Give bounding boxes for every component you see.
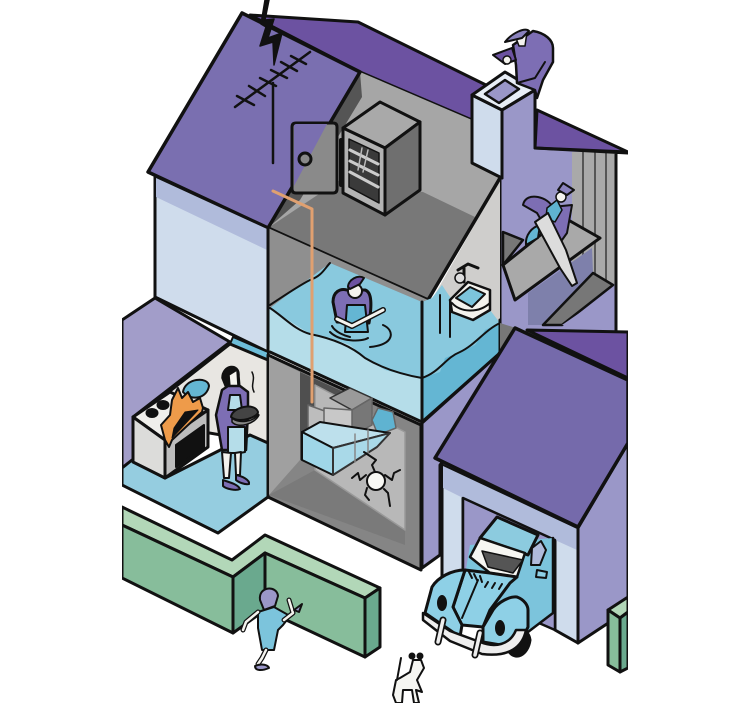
icon: blue beetle car bbox=[423, 517, 553, 656]
panel: garage bbox=[435, 328, 628, 643]
pipe: orange gas line bbox=[273, 191, 312, 402]
panel: attic floor edge bbox=[268, 178, 500, 300]
icon: burning stove bbox=[133, 380, 209, 478]
icon: tv antenna bbox=[235, 52, 310, 163]
panel: right side wall behind sink bbox=[435, 182, 500, 321]
icon: overflowing sink bbox=[440, 264, 490, 337]
icon: sparking light bulb bbox=[352, 452, 400, 506]
panel: garden wall bbox=[122, 507, 380, 657]
panel: sawing table bbox=[503, 217, 600, 300]
icon: man climbing wall bbox=[243, 589, 302, 670]
panel: kitchen floor and walls bbox=[122, 298, 268, 533]
icon: woman with burnt turkey bbox=[216, 366, 259, 490]
icon: open safe bbox=[292, 102, 420, 215]
icon: lightning bolt bbox=[260, 0, 282, 65]
panel: lower room cutaway bbox=[268, 355, 421, 570]
panel: chimney bbox=[472, 72, 535, 178]
panel: attic interior bbox=[268, 72, 500, 300]
icon: dog bbox=[393, 654, 424, 703]
panel: back roof slope bbox=[250, 15, 490, 120]
panel: upper flood room bbox=[266, 228, 502, 423]
icon: man sawing bbox=[523, 183, 577, 286]
panel: front roof slope bbox=[148, 13, 360, 228]
icon: plumber with wrench in water bbox=[330, 277, 391, 347]
panel: left house wall bbox=[155, 177, 268, 352]
icon: ghost safe in lower room bbox=[307, 387, 397, 432]
panel: green block at right bbox=[608, 597, 628, 672]
panel: back wing wall and roof bbox=[500, 90, 628, 332]
panel: right house wall below flood bbox=[422, 323, 516, 568]
illustration: isometric house cutaway bbox=[122, 0, 628, 703]
icon: blue storage box bbox=[302, 422, 390, 475]
icon: man peering into chimney bbox=[493, 30, 553, 98]
